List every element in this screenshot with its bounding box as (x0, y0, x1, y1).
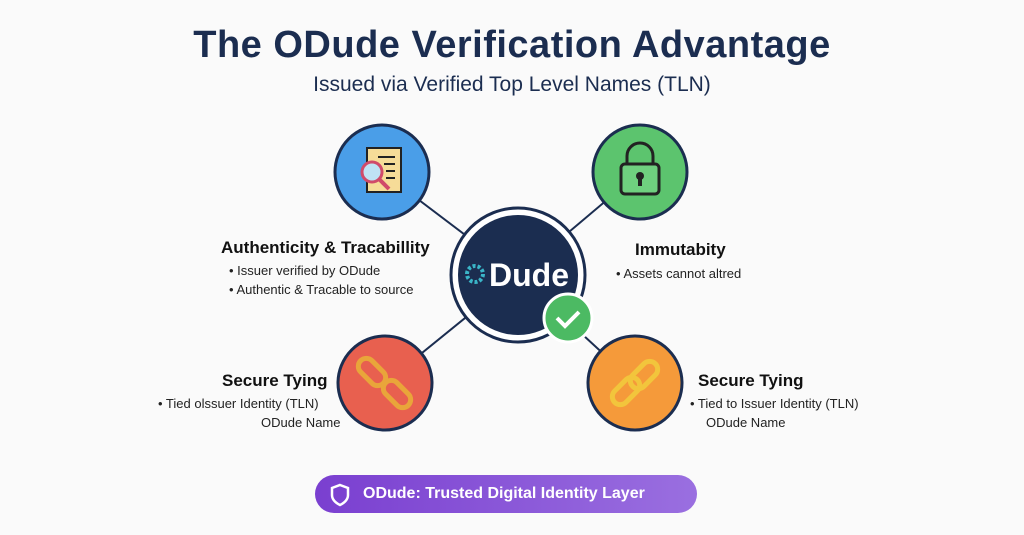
center logo (451, 208, 585, 342)
text: secure tying left: • Tied olssuer Identity (TLN) (158, 396, 319, 411)
icon: document search (blue) (335, 125, 429, 219)
icon: shield (330, 484, 350, 506)
text: secure tying left (158, 371, 340, 430)
icon: lock (green) (593, 125, 687, 219)
footer pill: ODude: Trusted Digital Identity Layer (363, 485, 645, 502)
text: secure tying right: Secure Tying (698, 371, 804, 390)
icon: chain (red) (338, 336, 432, 430)
text: authenticity: • Authentic & Tracable to source (229, 282, 414, 297)
footer pill (315, 475, 697, 513)
text: authenticity: • Issuer verified by ODude (229, 263, 380, 278)
center logo: Dude (489, 257, 569, 293)
check badge (544, 294, 592, 342)
text: authenticity (221, 238, 430, 297)
text: secure tying right: • Tied to Issuer Identity (TLN) (690, 396, 859, 411)
text: secure tying left: ODude Name (261, 415, 340, 430)
text: secure tying right: ODude Name (706, 415, 785, 430)
text: immutability: • Assets cannot altred (616, 266, 741, 281)
text: authenticity: Authenticity & Tracabillity (221, 238, 430, 257)
text: secure tying right (690, 371, 859, 430)
title: The ODude Verification Advantage (193, 24, 831, 66)
text: secure tying left: Secure Tying (222, 371, 328, 390)
connectors (382, 172, 640, 383)
subtitle: Issued via Verified Top Level Names (TLN) (313, 73, 711, 96)
icon: chain (orange) (588, 336, 682, 430)
text: immutability: Immutabity (635, 240, 726, 259)
text: immutability (616, 240, 741, 281)
